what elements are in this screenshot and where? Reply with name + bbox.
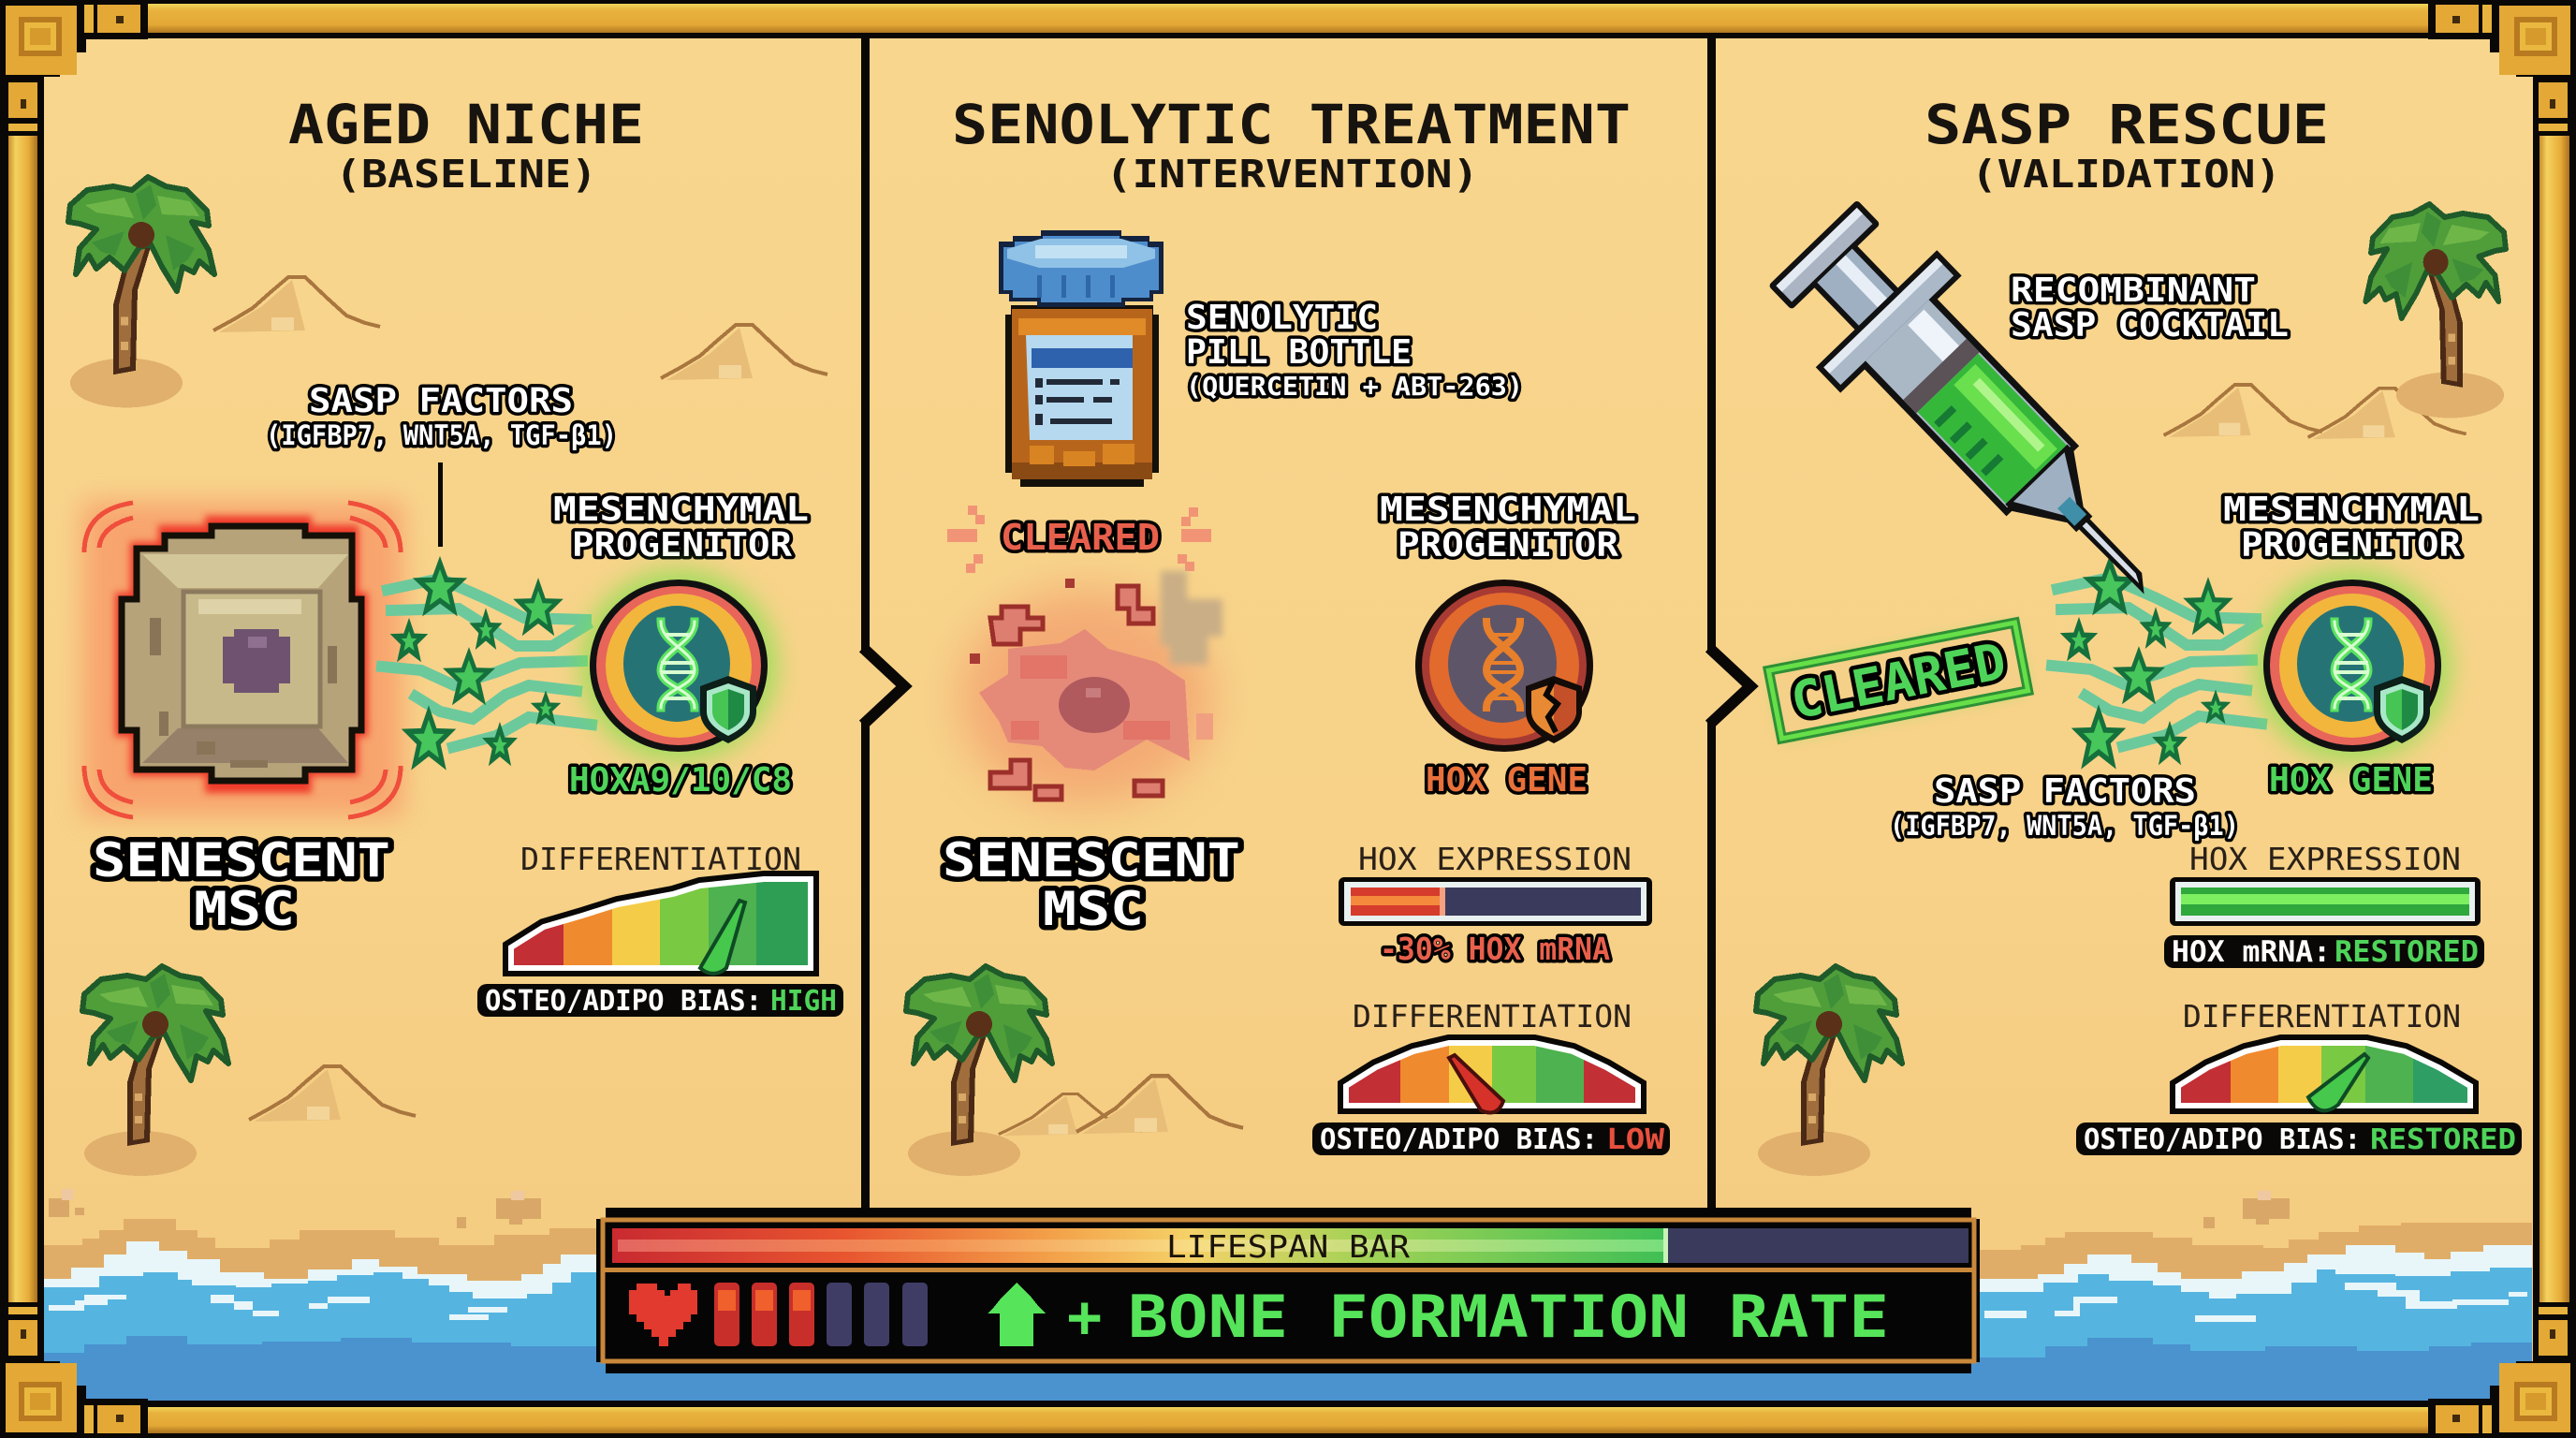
label: senescent msc: SENESCENT <box>93 833 390 888</box>
panel: aged niche baseline <box>82 93 843 1018</box>
heading: aged niche <box>288 93 644 197</box>
label: osteo adipo bias low: OSTEO/ADIPO BIAS: <box>1320 1123 1598 1156</box>
ocean strip under status bar <box>562 1329 2022 1401</box>
heading: senolytic treatment: SENOLYTIC TREATMENT <box>952 93 1631 156</box>
gauge: differentiation restored <box>2172 1034 2475 1110</box>
label: hox mrna restored: HOX mRNA: <box>2172 935 2331 969</box>
label: minus 30 percent hox mrna: -30% HOX mRNA <box>1380 931 1610 967</box>
label: senolytic pill bottle <box>1186 299 1523 402</box>
label: hox mrna restored <box>2164 935 2484 969</box>
lifespan progress bar: LIFESPAN BAR <box>1166 1228 1410 1265</box>
bar: hox expression low <box>1339 877 1652 926</box>
stamp: cleared: CLEARED <box>1786 631 2011 731</box>
label: mesenchymal progenitor <box>2223 491 2480 565</box>
label: cleared with rays <box>947 506 1211 573</box>
label: senescent msc: MSC <box>194 882 295 936</box>
label: mesenchymal progenitor: MESENCHYMAL <box>2223 491 2480 529</box>
label: osteo adipo bias high: HIGH <box>770 985 837 1018</box>
label: hox mrna restored: RESTORED <box>2334 935 2479 969</box>
sasp factor particles and streams <box>2052 562 2261 763</box>
label: differentiation: DIFFERENTIATION <box>520 841 801 877</box>
label: mesenchymal progenitor <box>1380 491 1636 565</box>
gauge: differentiation high <box>511 871 812 974</box>
label: sasp factors <box>1890 772 2239 842</box>
heading: aged niche: (BASELINE) <box>335 152 597 197</box>
health pips <box>714 1283 928 1346</box>
heading: sasp rescue: (VALIDATION) <box>1971 152 2281 197</box>
beach and ocean: right <box>1975 1223 2532 1404</box>
label: hox expression: HOX EXPRESSION <box>2189 841 2461 877</box>
label: mesenchymal progenitor: MESENCHYMAL <box>1380 491 1636 529</box>
label: sasp factors: SASP FACTORS <box>1934 772 2196 811</box>
label: bone formation rate: + <box>1067 1283 1102 1351</box>
dunes <box>213 277 2466 1136</box>
label: sasp factors: (IGFBP7, WNT5A, TGF-β1) <box>1890 810 2239 842</box>
icon: corner pulse arcs <box>84 503 401 817</box>
label: hox gene: HOX GENE <box>2269 761 2433 800</box>
beach and ocean: left <box>44 1219 599 1404</box>
leader line <box>438 462 443 547</box>
icon: restored dna badge <box>2255 570 2450 761</box>
heading: sasp rescue: SASP RESCUE <box>1925 93 2329 156</box>
label: sasp factors <box>266 382 617 451</box>
heading: senolytic treatment: (INTERVENTION) <box>1105 152 1479 197</box>
label: senescent msc <box>93 833 390 936</box>
heading: senolytic treatment <box>952 93 1631 197</box>
sasp factor particles and streams <box>382 563 592 764</box>
icon: cleared exploded cell <box>959 571 1222 805</box>
icon: pill bottle <box>999 230 1164 487</box>
label: osteo adipo bias restored: OSTEO/ADIPO BIAS: <box>2084 1123 2361 1156</box>
label: mesenchymal progenitor: PROGENITOR <box>1398 526 1618 565</box>
label: differentiation: DIFFERENTIATION <box>1353 998 1632 1034</box>
label: mesenchymal progenitor: PROGENITOR <box>2241 526 2461 565</box>
palm trees <box>68 177 2506 1176</box>
label: senescent msc <box>943 833 1240 936</box>
label: sasp factors: SASP FACTORS <box>309 382 573 420</box>
label: osteo adipo bias low: LOW <box>1606 1123 1665 1156</box>
label: senolytic pill bottle: SENOLYTIC <box>1186 299 1378 337</box>
icon: damaged dna badge <box>1415 580 1593 752</box>
panel dividers with chevrons <box>861 37 1750 1210</box>
label: osteo adipo bias restored: RESTORED <box>2370 1123 2516 1156</box>
label: recombinant sasp cocktail: RECOMBINANT <box>2011 271 2256 310</box>
label: cleared with rays: CLEARED <box>1001 517 1160 558</box>
label: bone formation rate: BONE FORMATION RATE <box>1128 1283 1889 1351</box>
heading: sasp rescue <box>1925 93 2329 197</box>
label: hox gene: HOX GENE <box>1426 761 1588 800</box>
panel: sasp rescue validation <box>1752 93 2522 1156</box>
panel: lifespan bar hud <box>596 1208 1980 1373</box>
label: senescent msc: MSC <box>1043 882 1144 936</box>
label: mesenchymal progenitor <box>553 491 809 565</box>
icon: healthy dna badge <box>581 570 776 761</box>
label: differentiation: DIFFERENTIATION <box>2183 998 2461 1034</box>
label: osteo adipo bias restored <box>2076 1123 2522 1156</box>
label: recombinant sasp cocktail: SASP COCKTAIL <box>2011 306 2289 345</box>
label: mesenchymal progenitor: MESENCHYMAL <box>553 491 809 529</box>
heading: aged niche: AGED NICHE <box>288 93 644 156</box>
panel: senolytic treatment intervention <box>943 93 1670 1156</box>
bar: hox expression restored <box>2170 877 2481 926</box>
label: osteo adipo bias high: OSTEO/ADIPO BIAS: <box>485 985 762 1018</box>
label: hox expression: HOX EXPRESSION <box>1358 841 1632 877</box>
label: senescent msc: SENESCENT <box>943 833 1240 888</box>
label: senolytic pill bottle: PILL BOTTLE <box>1186 333 1412 372</box>
label: senolytic pill bottle: (QUERCETIN + ABT-263) <box>1186 371 1523 402</box>
icon: senescent stone cell <box>82 502 402 817</box>
icon: up arrow <box>988 1283 1046 1346</box>
label: recombinant sasp cocktail <box>2011 271 2289 345</box>
icon: heart <box>629 1284 697 1346</box>
lifespan progress bar <box>612 1228 1969 1265</box>
label: hoxa9/10/c8: HOXA9/10/C8 <box>569 761 792 800</box>
beach shells <box>49 1189 2290 1228</box>
gauge: differentiation low <box>1339 1034 1646 1112</box>
label: mesenchymal progenitor: PROGENITOR <box>572 526 792 565</box>
label: sasp factors: (IGFBP7, WNT5A, TGF-β1) <box>266 419 617 451</box>
icon: syringe <box>1752 184 2209 649</box>
